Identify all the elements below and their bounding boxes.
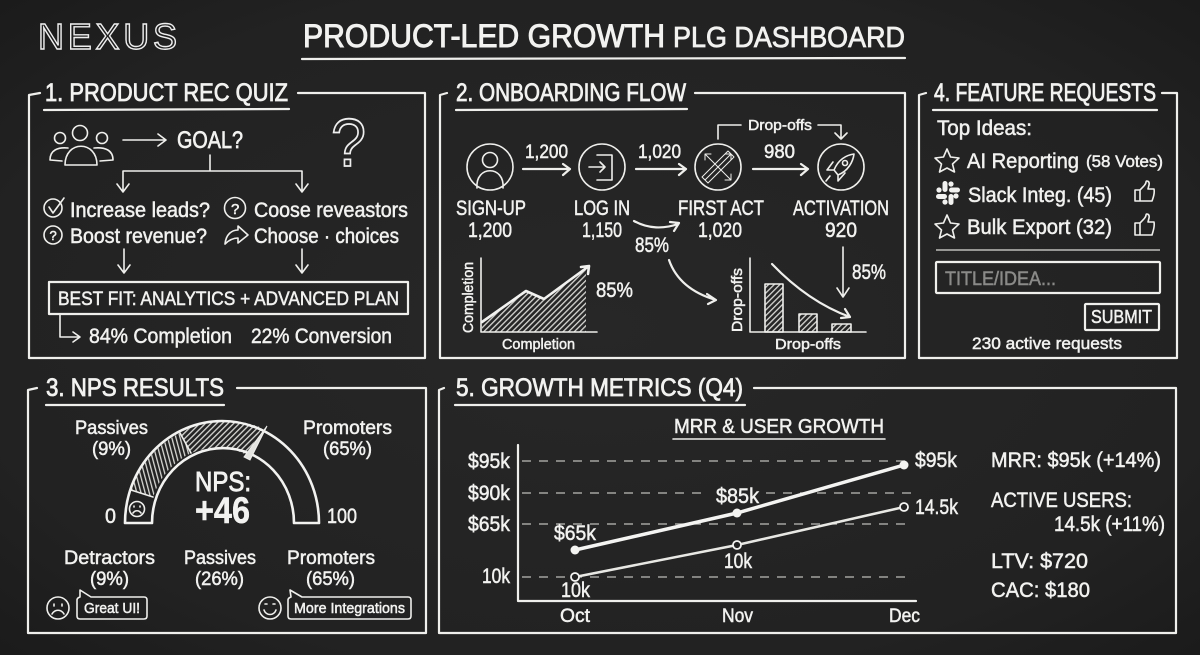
label: promoters upper: (65%) (323, 439, 372, 460)
arrow: log in to first act (634, 221, 679, 231)
heading: nps results: 3. NPS RESULTS (46, 374, 224, 402)
icon: question circle (44, 226, 62, 244)
step: activation: ACTIVATION (793, 197, 889, 220)
icon: log in (579, 144, 625, 190)
arrow: best fit to stats (60, 315, 80, 342)
y axis labels (468, 450, 510, 588)
x axis labels (560, 606, 920, 627)
metric: cac: CAC: $180 (991, 579, 1090, 602)
metric: active users (991, 489, 1165, 536)
x axis labels: Oct (560, 606, 591, 627)
gauge scale: 0: 0 (105, 505, 116, 528)
label: detractors (64, 548, 155, 590)
point labels: 10k (561, 579, 590, 602)
label: 1,200: 1,200 (525, 142, 568, 163)
icon: sad face in gauge (130, 502, 144, 516)
arrow: activation drop (837, 247, 849, 297)
panel: growth metrics (439, 374, 1176, 633)
metric: mrr: MRR: $95k (+14%) (991, 449, 1161, 472)
step: activation (793, 197, 889, 242)
title: PRODUCT-LED GROWTH (303, 18, 665, 54)
text: goal: GOAL? (177, 127, 243, 154)
label: 1,020: 1,020 (638, 142, 681, 163)
icon: star (935, 215, 959, 238)
chart heading: MRR & USER GROWTH (674, 416, 884, 438)
input: title idea (936, 262, 1160, 293)
point labels: $85k (716, 485, 759, 508)
step: first act (678, 197, 764, 242)
y axis labels: 10k (482, 565, 510, 588)
series: mrr (570, 460, 908, 554)
step: log in: LOG IN (574, 197, 630, 220)
metric: active users: ACTIVE USERS: (991, 489, 1132, 512)
arrow: to drop-offs chart (669, 260, 716, 304)
text: boost revenue: Boost revenue? (70, 225, 207, 248)
nps score (195, 466, 251, 531)
logo: NEXUS: NEXUS (38, 16, 177, 57)
icon: first act (695, 144, 741, 190)
callout: great ui (77, 590, 147, 619)
nps score: NPS: (195, 466, 251, 497)
step: log in (574, 197, 630, 242)
panel: feature requests (919, 79, 1177, 358)
panel: product rec quiz (29, 79, 425, 358)
icon: users group (50, 126, 113, 165)
chart: mrr and user growth (468, 445, 958, 627)
icon: sign-up (467, 144, 513, 190)
chart: drop-offs bars: Drop-offs (775, 336, 841, 353)
text: conversion: 22% Conversion (251, 325, 392, 348)
label: 980: 980 (764, 142, 795, 163)
title: PLG DASHBOARD (673, 22, 905, 54)
label: promoters: Promoters (287, 548, 375, 569)
text: choose reveastors: Coose reveastors (254, 199, 408, 222)
icon: question circle: ? (50, 228, 57, 243)
y axis labels: $65k (468, 513, 510, 536)
input: title idea: TITLE/IDEA... (945, 269, 1056, 290)
label: promoters upper: Promoters (303, 418, 392, 439)
icon: share arrow (225, 226, 248, 244)
icon: slack (936, 181, 960, 205)
point labels: $95k (915, 449, 957, 472)
icon: sad face (47, 597, 69, 619)
step: first act: FIRST ACT (678, 197, 764, 220)
chart: drop-offs bars (729, 258, 866, 353)
step: sign-up: 1,200 (468, 219, 512, 242)
label: passives (184, 548, 256, 590)
arrow (636, 164, 686, 175)
arrow: users to goal (123, 134, 166, 146)
icon: check (44, 198, 64, 217)
metric: active users: 14.5k (+11%) (1054, 513, 1165, 536)
chart: completion area: Completion (460, 262, 477, 333)
label: detractors: Detractors (64, 548, 155, 569)
nps score: +46 (195, 490, 250, 531)
metric: ltv: LTV: $720 (991, 550, 1088, 573)
text: completion: 84% Completion (89, 325, 232, 348)
chart: completion area (460, 258, 633, 353)
label: passives upper: (9%) (92, 439, 131, 460)
text: top ideas: Top Ideas: (937, 117, 1032, 140)
chart: completion area: Completion (502, 336, 575, 353)
idea: slack integration: Slack Integ. (45) (968, 184, 1112, 207)
idea: ai reporting: AI Reporting (967, 150, 1079, 173)
label: passives upper (75, 418, 148, 460)
callout: more integrations (288, 590, 411, 619)
panel: onboarding flow (440, 79, 905, 358)
label: passives upper: Passives (75, 418, 148, 439)
idea: ai reporting: (58 Votes) (1086, 152, 1163, 171)
label: 85%: 85% (852, 261, 886, 284)
label: passives: Passives (184, 548, 256, 569)
chart: completion area: 85% (596, 279, 633, 302)
x axis labels: Nov (722, 606, 753, 627)
button: submit: SUBMIT (1091, 307, 1152, 327)
label: passives: (26%) (195, 569, 244, 590)
callout: best fit (49, 282, 408, 314)
step: sign-up (456, 197, 526, 242)
series: users (571, 503, 908, 581)
label: promoters upper (303, 418, 392, 460)
arrows: to best fit (118, 249, 308, 273)
step: first act: 1,020 (698, 219, 742, 242)
text: choose choices: Choose · choices (254, 225, 399, 248)
arrows: goal branches (117, 155, 308, 192)
y axis labels: $95k (468, 450, 510, 473)
chart: drop-offs bars: Drop-offs (729, 268, 746, 332)
text: increase leads: Increase leads? (70, 199, 210, 222)
arrow: drop-offs loop: Drop-offs (748, 117, 812, 134)
step: sign-up: SIGN-UP (456, 197, 526, 220)
label: detractors: (9%) (90, 569, 129, 590)
icon: question circle (224, 198, 246, 218)
arrow: drop-offs loop (718, 117, 847, 139)
needle (244, 426, 267, 460)
y axis labels: $90k (468, 482, 510, 505)
arrow (753, 164, 808, 175)
callout: great ui: Great UI! (84, 600, 140, 617)
icon: star (935, 149, 959, 172)
point labels: 14.5k (915, 496, 958, 519)
step: activation: 920 (825, 219, 857, 242)
icon: thumb up (1135, 214, 1154, 235)
heading: onboarding flow: 2. ONBOARDING FLOW (456, 79, 686, 107)
x axis labels: Dec (889, 606, 920, 627)
icon: thumb up (1135, 181, 1154, 201)
point labels: $65k (554, 522, 596, 545)
point labels (554, 449, 958, 602)
panel: nps results (28, 374, 426, 633)
callout: more integrations: More Integrations (294, 600, 405, 617)
chart: nps gauge (125, 421, 319, 523)
idea: bulk export: Bulk Export (32) (967, 216, 1112, 239)
point labels: 10k (724, 550, 752, 573)
icon: question circle: ? (231, 201, 239, 218)
text: active requests: 230 active requests (972, 334, 1122, 353)
label: 85%: 85% (635, 234, 669, 257)
icon: activation rocket (818, 144, 864, 190)
arrow (523, 164, 570, 175)
gauge scale: 100: 100 (327, 505, 357, 528)
heading: growth metrics: 5. GROWTH METRICS (Q4) (456, 374, 743, 402)
idea: ai reporting (967, 150, 1163, 173)
title (302, 18, 905, 59)
icon: happy face (259, 597, 281, 619)
label: promoters (287, 548, 375, 590)
icon: question mark: ? (331, 105, 366, 181)
heading: product rec quiz: 1. PRODUCT REC QUIZ (45, 79, 288, 107)
callout: best fit: BEST FIT: ANALYTICS + ADVANCED PLAN (58, 289, 399, 310)
label: promoters: (65%) (306, 569, 355, 590)
step: log in: 1,150 (582, 219, 622, 242)
